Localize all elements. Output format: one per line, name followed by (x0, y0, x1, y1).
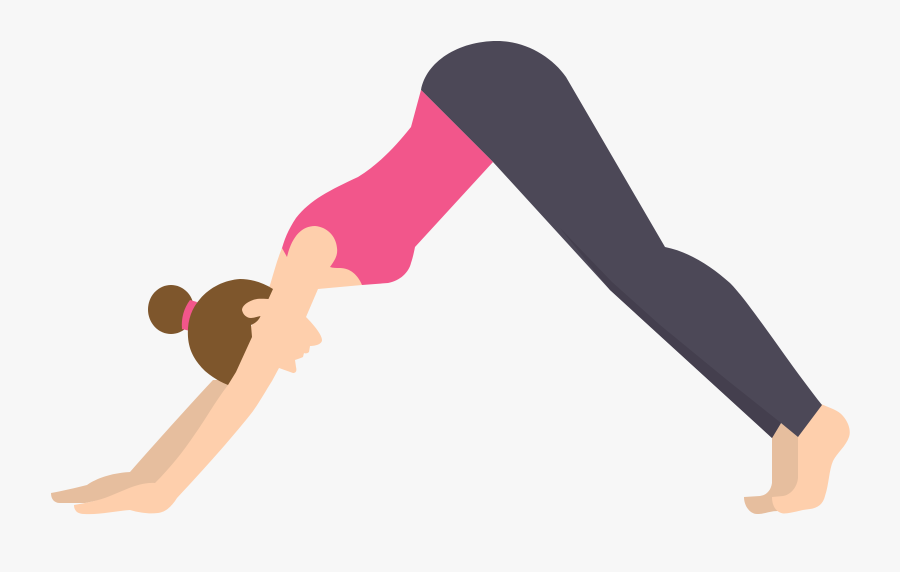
hair bun (148, 285, 194, 334)
hair tie (182, 300, 197, 331)
leggings (421, 41, 822, 438)
ear (242, 299, 272, 318)
back foot (shaded) (744, 423, 800, 514)
leggings shadow stripe (560, 228, 781, 438)
figure (51, 41, 850, 514)
pink leotard (281, 90, 493, 285)
skin: arm, neck, face (74, 226, 362, 514)
front foot (772, 404, 850, 514)
back arm and hand (shaded) (51, 380, 240, 503)
hair (188, 279, 273, 385)
